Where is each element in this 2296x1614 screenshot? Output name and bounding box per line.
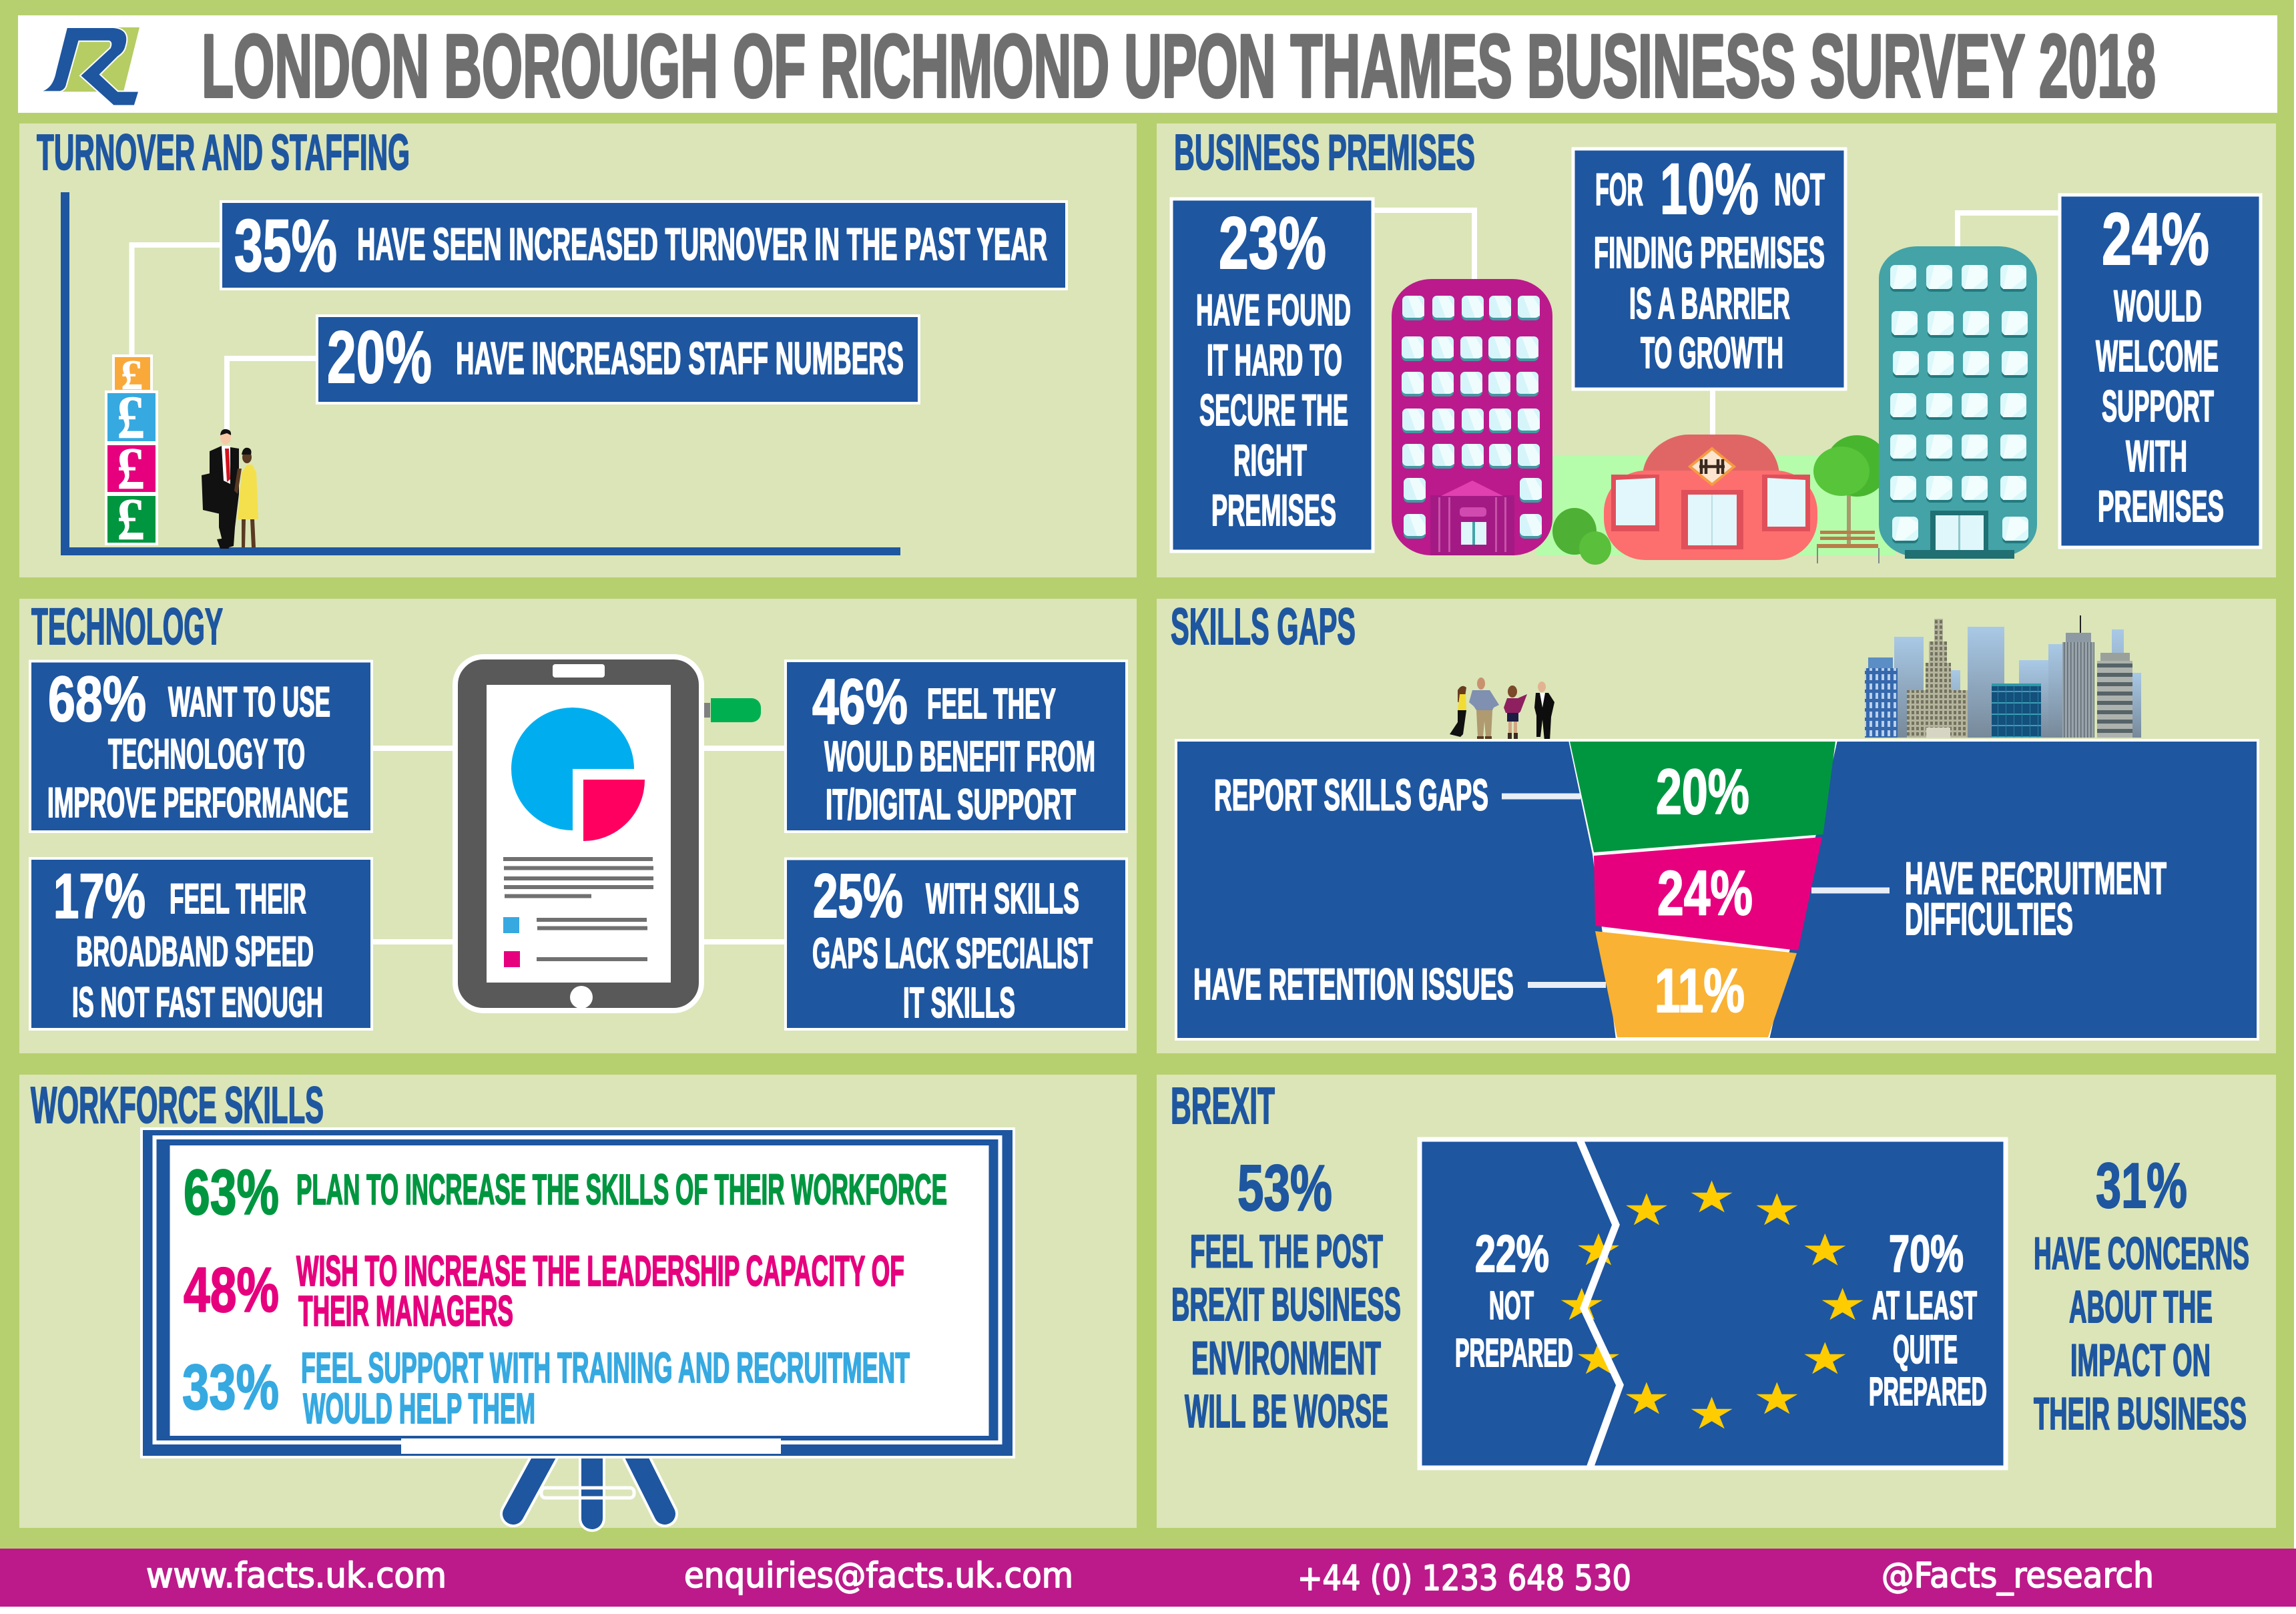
stat box: 23%: IT HARD TO: [1207, 335, 1342, 384]
heading: brexit: BREXIT: [1171, 1077, 1275, 1135]
funnel segment: 24%: [1594, 837, 1822, 951]
stat box: 10%: [1573, 148, 1845, 389]
value: 11%: 11%: [1655, 956, 1745, 1025]
panel: skills gaps: [1157, 598, 2276, 1053]
stat box: 10%: NOT: [1774, 164, 1825, 215]
label: recruitment difficulties: DIFFICULTIES: [1905, 894, 2073, 945]
stat box: 17%: IS NOT FAST ENOUGH: [72, 979, 323, 1026]
stat box: 35% turnover: HAVE SEEN INCREASED TURNOVER IN THE PAST YEAR: [357, 219, 1047, 270]
footer: twitter: @Facts_research: [1882, 1556, 2154, 1596]
stat: 70% at least quite prepared: [1869, 1224, 1987, 1414]
stat box: 46%: WOULD BENEFIT FROM: [824, 732, 1095, 780]
stat box: 20% staff: [317, 316, 919, 403]
stat box: 23%: PREMISES: [1211, 485, 1336, 535]
stat box: 25%: IT SKILLS: [903, 979, 1015, 1027]
stat box: 17%: 17%: [53, 861, 146, 932]
stat box: 23%: HAVE FOUND: [1196, 285, 1351, 334]
stat box: 10%: FOR: [1595, 164, 1643, 215]
stat box: 17%: BROADBAND SPEED: [76, 928, 314, 975]
footer: website: www.facts.uk.com: [146, 1556, 447, 1596]
stat: 22% not prepared: PREPARED: [1455, 1331, 1573, 1375]
stat box: 68%: 68%: [48, 663, 146, 735]
stat box: 68%: TECHNOLOGY TO: [108, 731, 305, 778]
stat box: 23%: SECURE THE: [1199, 385, 1348, 435]
icon: tablet with pie chart: [455, 657, 701, 1011]
stat box: 24%: 24%: [2102, 198, 2209, 280]
stat box: 24%: [2060, 195, 2261, 547]
stat: 53%: FEEL THE POST: [1190, 1226, 1383, 1278]
stat box: 68%: WANT TO USE: [168, 679, 330, 726]
icon: tree and bench: [1813, 435, 1888, 563]
heading: business premises: BUSINESS PREMISES: [1174, 124, 1475, 180]
icon: stack of pound blocks: [106, 351, 157, 553]
stat box: 25%: 25%: [813, 861, 903, 930]
stat box: 25%: [786, 858, 1127, 1029]
stat: 53%: BREXIT BUSINESS: [1171, 1278, 1401, 1330]
panel: business premises: [1157, 123, 2276, 577]
board line: 33%: 33%: [182, 1352, 279, 1423]
stat box: 10%: IS A BARRIER: [1629, 278, 1790, 328]
stat box: 25%: GAPS LACK SPECIALIST: [812, 929, 1093, 977]
board line: 33%: WOULD HELP THEM: [303, 1384, 535, 1432]
stat: 22% not prepared: [1455, 1224, 1573, 1375]
icon: stack of pound blocks: £: [117, 383, 145, 451]
stat box: 68%: [30, 661, 372, 832]
header banner: [18, 15, 2277, 116]
icon: ring of stars: [1561, 1180, 1863, 1428]
stat: 22% not prepared: 22%: [1475, 1224, 1549, 1283]
stat box: 20% staff: 20%: [327, 316, 432, 398]
connector: 10% to gym: [1710, 390, 1715, 435]
heading: turnover and staffing: TURNOVER AND STAFFING: [37, 124, 410, 180]
lawn: [1536, 456, 1896, 555]
stat box: 46%: FEEL THEY: [927, 680, 1056, 728]
stat box: 25%: WITH SKILLS: [926, 874, 1079, 922]
stat box: 10%: FINDING PREMISES: [1594, 228, 1825, 277]
funnel outline: [1568, 740, 1837, 1039]
icon: USB stick: [704, 698, 761, 722]
value: 20%: 20%: [1656, 756, 1749, 828]
stat: 31%: 31%: [2096, 1150, 2187, 1222]
icon: company logo: [38, 27, 139, 105]
icon: city skyline: [1865, 615, 2141, 738]
stat: 53%: WILL BE WORSE: [1185, 1385, 1388, 1437]
stat: 53%: ENVIRONMENT: [1191, 1332, 1381, 1384]
icon: stack of pound blocks: £: [121, 351, 143, 398]
board frame: [141, 1129, 1014, 1457]
icon: left bushes: [1552, 508, 1611, 565]
board line: 33%: [182, 1344, 910, 1432]
stat: 31%: [2034, 1150, 2249, 1439]
stat box: 17%: FEEL THEIR: [170, 876, 306, 922]
icon: stack of pound blocks: £: [117, 436, 145, 502]
board line: 33%: FEEL SUPPORT WITH TRAINING AND RECRUITMENT: [301, 1344, 910, 1392]
icon: magenta office building: [1392, 279, 1552, 555]
stat: 53%: 53%: [1237, 1151, 1332, 1224]
funnel segment: 11%: [1595, 931, 1797, 1037]
heading: workforce skills: WORKFORCE SKILLS: [31, 1077, 324, 1134]
stat box: 10%: TO GROWTH: [1641, 328, 1783, 377]
stat box: 46%: [786, 661, 1127, 832]
label: recruitment difficulties: [1811, 853, 2167, 945]
stat box: 46%: 46%: [812, 666, 908, 738]
stat: 70% at least quite prepared: PREPARED: [1869, 1370, 1987, 1414]
stat: 70% at least quite prepared: QUITE: [1893, 1328, 1958, 1372]
stat box: 17%: [30, 858, 372, 1029]
board line: 48%: WISH TO INCREASE THE LEADERSHIP CAPACITY OF: [296, 1247, 904, 1295]
panel: workforce skills: [19, 1075, 1137, 1528]
connector: staff: [227, 358, 316, 431]
connectors to tablet: [372, 748, 785, 942]
label: retention issues: HAVE RETENTION ISSUES: [1193, 959, 1514, 1009]
stat: 53%: [1171, 1151, 1401, 1437]
connector: turnover: [132, 245, 220, 356]
board line: 63%: PLAN TO INCREASE THE SKILLS OF THEIR WORKFORCE: [296, 1165, 947, 1214]
icon: group of people: [1450, 678, 1554, 741]
icon: gym building: [1604, 435, 1817, 560]
board line: 48%: THEIR MANAGERS: [298, 1287, 513, 1335]
heading: technology: TECHNOLOGY: [31, 598, 223, 655]
EU flag panel: [1420, 1139, 2006, 1468]
icon: easel legs: [513, 1454, 665, 1519]
stat: 70% at least quite prepared: AT LEAST: [1872, 1284, 1977, 1328]
stat box: 10%: 10%: [1660, 148, 1759, 229]
funnel panel: [1176, 740, 2258, 1039]
panel: turnover and staffing: [19, 123, 1137, 577]
icon: teal office building: [1879, 246, 2037, 559]
board line: 48%: [184, 1247, 904, 1335]
stat box: 23%: RIGHT: [1233, 435, 1307, 485]
value: 24%: 24%: [1657, 858, 1753, 929]
board line: 63%: 63%: [184, 1157, 279, 1228]
stat box: 24%: WOULD: [2114, 281, 2202, 330]
label: report skills gaps: REPORT SKILLS GAPS: [1214, 770, 1488, 820]
stat box: 68%: IMPROVE PERFORMANCE: [47, 780, 348, 826]
stat box: 35% turnover: [221, 202, 1067, 289]
stat box: 24%: WITH: [2126, 431, 2187, 481]
board line: 48%: 48%: [184, 1255, 279, 1326]
stat: 22% not prepared: NOT: [1489, 1284, 1534, 1328]
footer: phone: +44 (0) 1233 648 530: [1298, 1559, 1631, 1599]
funnel segment: 20%: [1570, 742, 1835, 852]
stat box: 35% turnover: 35%: [234, 205, 337, 287]
stat box: 23%: [1171, 199, 1373, 551]
footer: email: enquiries@facts.uk.com: [684, 1556, 1073, 1596]
panel: technology: [19, 598, 1137, 1053]
board line: 63%: [184, 1157, 947, 1228]
stat box: 20% staff: HAVE INCREASED STAFF NUMBERS: [456, 333, 904, 384]
footer bar: [0, 1549, 2296, 1607]
panel: brexit: [1157, 1075, 2276, 1528]
heading: skills gaps: SKILLS GAPS: [1171, 598, 1356, 655]
divider: zigzag tear: [1580, 1140, 1620, 1468]
icon: stack of pound blocks: £: [117, 487, 145, 553]
stat: 70% at least quite prepared: 70%: [1889, 1224, 1964, 1283]
stat box: 23%: 23%: [1219, 202, 1326, 284]
connector: 24% to teal building: [1958, 213, 2060, 247]
connector: 23% to magenta building: [1374, 210, 1474, 280]
icon: business couple: [202, 429, 258, 549]
stat box: 46%: IT/DIGITAL SUPPORT: [826, 780, 1076, 828]
chart axes: [61, 192, 900, 555]
